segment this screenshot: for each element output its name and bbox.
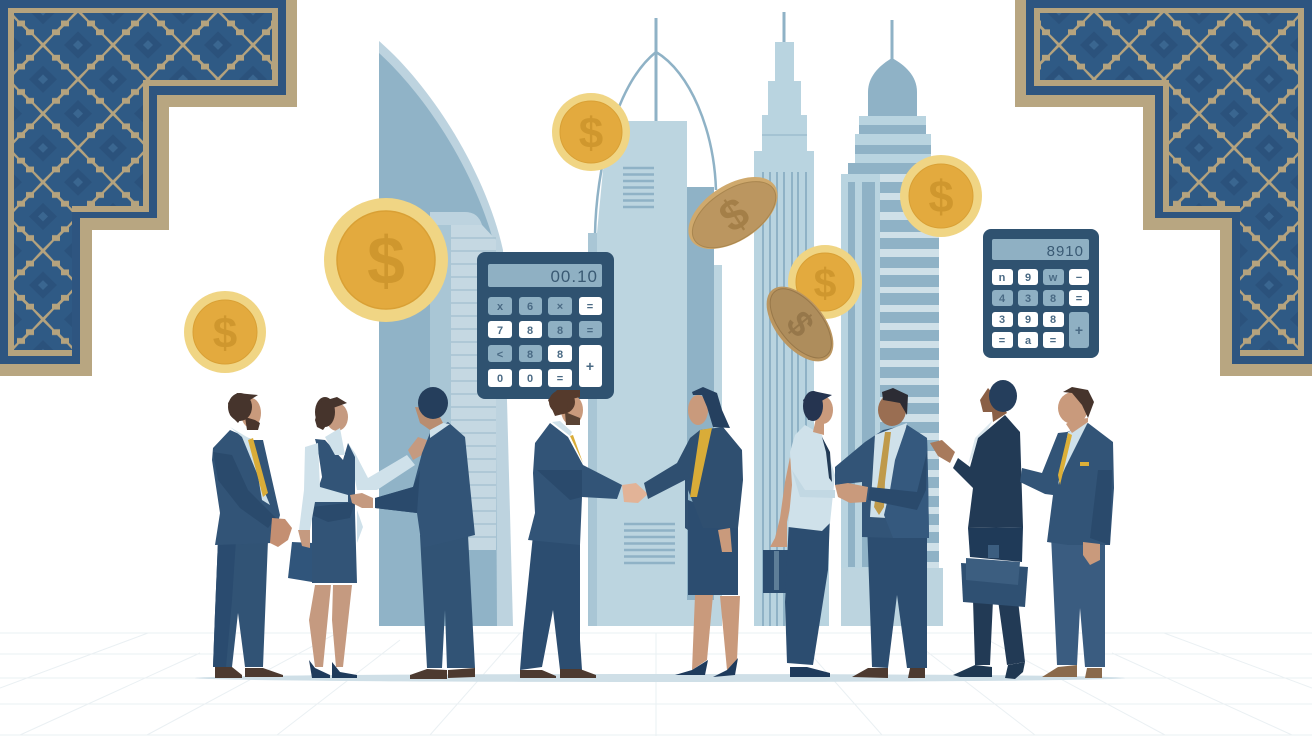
calculator keys (992, 269, 1089, 348)
coin: far left (184, 291, 266, 373)
corner ornament: top left (0, 0, 297, 376)
coin: far left: $ (213, 309, 237, 358)
floor grid (0, 633, 1312, 736)
person 2: woman with vest and folder (288, 397, 427, 678)
coin: tilted upper (676, 162, 790, 264)
calculator keys: 9 (1025, 272, 1031, 284)
coin: large left: $ (367, 223, 405, 299)
calculator keys: − (1076, 272, 1082, 284)
corner ornament: top right (1015, 0, 1312, 376)
calculator: left (477, 252, 614, 399)
calculator keys: < (497, 349, 503, 361)
person 1: bearded man with yellow tie (212, 393, 292, 678)
calculator keys: 8 (1050, 314, 1056, 326)
person 5: woman with long dark hair (644, 387, 743, 677)
building: sail tower (379, 41, 513, 626)
coin: top centre: $ (579, 109, 603, 158)
calculator display: 8910 (1047, 243, 1084, 260)
calculator keys: = (1076, 293, 1082, 305)
building: centre tower with arches (588, 18, 722, 626)
calculator keys: 6 (527, 301, 533, 313)
coin: middle right: $ (814, 260, 837, 306)
calculator keys: + (586, 358, 594, 374)
skyline buildings (379, 12, 943, 626)
coin: top centre (552, 93, 630, 171)
calculator keys: 0 (527, 373, 533, 385)
calculator keys: 8 (1050, 293, 1056, 305)
person 4: man shaking hands, centre (520, 390, 648, 678)
calculator keys: 4 (999, 293, 1006, 305)
calculator: right (983, 229, 1099, 358)
coin: top right: $ (928, 171, 954, 222)
calculator keys: x (497, 301, 504, 313)
calculator keys: 8 (557, 349, 563, 361)
calculator keys: 8 (527, 325, 533, 337)
ground shadow (195, 674, 1125, 682)
coin: middle right (788, 245, 862, 319)
calculator keys: 0 (497, 373, 503, 385)
person 7: man in suit with yellow tie (835, 388, 929, 678)
calculator keys: 3 (999, 314, 1005, 326)
person 3: man seen from behind right (350, 387, 475, 679)
coin: large left (324, 198, 448, 322)
coin: top right (900, 155, 982, 237)
calculator keys: 8 (527, 349, 533, 361)
calculator keys (488, 297, 602, 387)
person 6: woman in white jacket with case (763, 391, 835, 677)
calculator keys: n (999, 272, 1006, 284)
calculator keys: 9 (1025, 314, 1031, 326)
calculator keys: 7 (497, 325, 503, 337)
coin: tilted upper: $ (711, 188, 758, 242)
calculator keys: w (1048, 272, 1058, 284)
calculator keys: 8 (557, 325, 563, 337)
building: stepped tower (754, 12, 829, 626)
calculator keys: + (1075, 322, 1083, 338)
calculator keys: 3 (1025, 293, 1031, 305)
calculator keys: = (557, 373, 563, 385)
calculator keys: = (587, 325, 593, 337)
coin: tilted lower: $ (778, 303, 823, 344)
calculator keys: = (999, 335, 1005, 347)
building: dome tower (841, 20, 943, 626)
person 8: man gesturing with briefcase (930, 380, 1028, 679)
calculator keys: a (1025, 335, 1032, 347)
calculator display (488, 264, 602, 287)
coin: tilted lower (754, 275, 846, 373)
calculator display: 00.10 (550, 267, 598, 286)
person 9: man on the far right (1020, 387, 1114, 678)
calculator keys: = (1050, 335, 1056, 347)
calculator keys: = (587, 301, 593, 313)
calculator keys: × (557, 301, 563, 313)
